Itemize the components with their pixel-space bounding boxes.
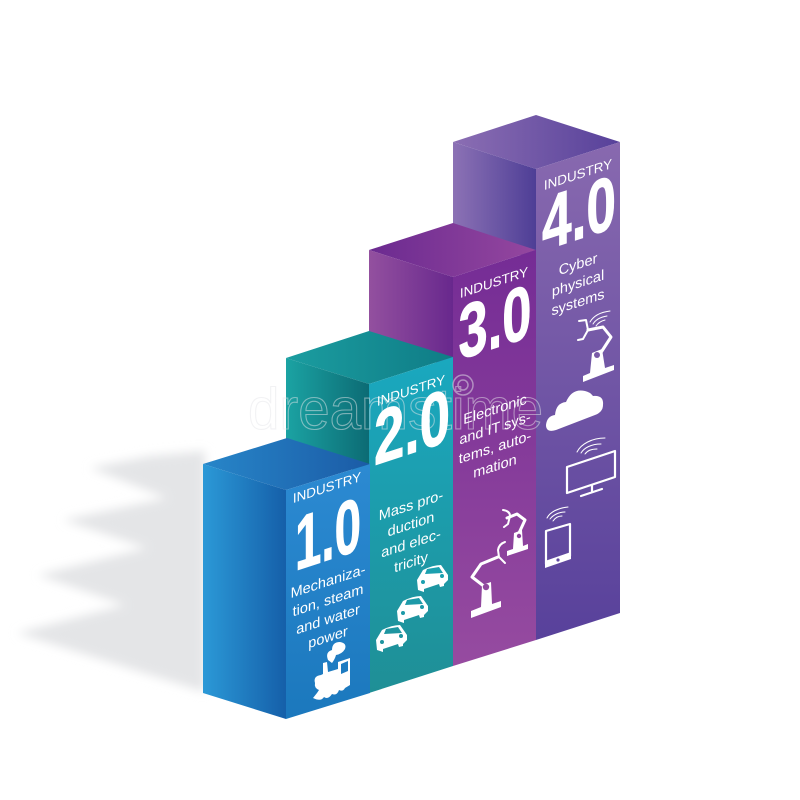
label: Industry 2.0: Mass pro- [379, 488, 443, 524]
icon: two robot arms [471, 510, 528, 618]
label: Industry 2.0 [374, 371, 450, 576]
label: Industry 2.0: and elec- [381, 527, 441, 562]
bar: Industry 1.0 [203, 438, 370, 719]
label: Industry 3.0: INDUSTRY [460, 264, 528, 301]
label: Industry 2.0: INDUSTRY [377, 372, 445, 409]
label: Industry 3.0: 3.0 [458, 267, 532, 376]
watermark: dreamstime [248, 377, 543, 442]
icon: robot arm with wifi [578, 311, 614, 382]
label: Industry 3.0: Electronic [463, 392, 527, 428]
label: Industry 1.0: power [308, 624, 348, 652]
icon: monitor with wifi [567, 438, 615, 496]
label: Industry 4.0: 4.0 [542, 158, 616, 268]
label: Industry 3.0 [458, 264, 532, 482]
label: Industry 2.0: 2.0 [374, 371, 450, 482]
icon: three cars [376, 565, 448, 652]
icon: tablet with wifi [545, 507, 571, 568]
label: Industry 4.0: systems [551, 287, 605, 320]
bar: Industry 2.0 [286, 331, 453, 693]
icon: steam locomotive [313, 642, 350, 700]
label: Industry 2.0: duction [388, 510, 434, 540]
label: Industry 1.0: 1.0 [295, 480, 361, 587]
label: Industry 1.0: INDUSTRY [293, 469, 361, 506]
cast shadow [17, 451, 205, 692]
label: Industry 3.0: tems, auto- [459, 429, 531, 468]
icon: cloud [546, 390, 603, 431]
bar: Industry 4.0 [453, 115, 620, 640]
label: Industry 4.0: INDUSTRY [544, 156, 612, 193]
bar: Industry 3.0 [369, 223, 536, 666]
label: Industry 3.0: and IT sys- [459, 410, 531, 448]
label: Industry 4.0: Cyber [559, 251, 597, 279]
label: Industry 3.0: mation [473, 452, 517, 482]
label: Industry 1.0 [291, 469, 365, 652]
label: Industry 2.0: tricity [394, 550, 428, 576]
label: Industry 1.0: and water [296, 602, 360, 638]
label: Industry 4.0: physical [552, 268, 604, 300]
label: Industry 1.0: tion, steam [293, 582, 363, 620]
label: Industry 1.0: Mechaniza- [291, 562, 365, 602]
label: Industry 4.0 [542, 156, 616, 320]
